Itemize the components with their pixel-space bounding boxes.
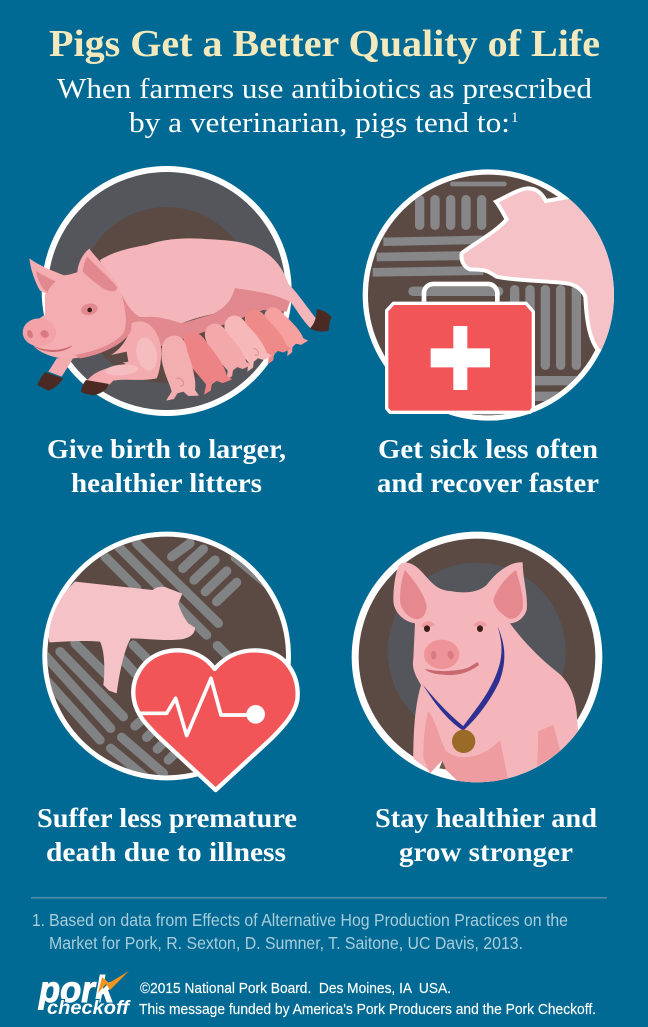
caption — [377, 433, 599, 498]
panel: healthier and stronger — [352, 532, 602, 867]
floor slats — [373, 182, 597, 421]
panel: less premature death — [37, 532, 298, 867]
subtitle: by a veterinarian, pigs tend to: — [129, 107, 510, 139]
leg shading — [423, 711, 510, 788]
front shoulder and leg — [87, 321, 161, 387]
icon: pig with medal — [352, 532, 602, 792]
eyes — [421, 621, 435, 628]
caption: grow stronger — [399, 836, 573, 867]
medal ribbon — [423, 626, 504, 731]
ears — [400, 570, 427, 619]
first aid kit — [387, 284, 533, 412]
subtitle — [57, 73, 593, 139]
copyright — [139, 980, 596, 1018]
icon: pig and first aid kit — [363, 169, 640, 421]
caption: Give birth to larger, — [47, 433, 286, 464]
caption: Stay healthier and — [375, 802, 597, 833]
snout — [23, 318, 56, 346]
gap between legs — [430, 761, 458, 781]
pig body and head — [393, 562, 580, 792]
floor slats — [40, 543, 273, 778]
caption — [37, 802, 297, 867]
pig silhouette — [459, 186, 614, 354]
subtitle: 1 — [511, 110, 518, 126]
pig silhouette — [49, 582, 195, 693]
hind hoof — [310, 309, 332, 331]
caption: Get sick less often — [378, 433, 598, 464]
logo: pork checkoff: checkoff — [47, 998, 131, 1019]
ears — [29, 258, 66, 295]
caption — [47, 433, 286, 498]
footnote: 1. — [32, 910, 45, 930]
caption: healthier litters — [71, 467, 262, 498]
footnote — [32, 910, 568, 953]
medal — [452, 730, 475, 753]
panel: larger litters — [23, 166, 332, 498]
footnote: Based on data from Effects of Alternative Hog Production Practices on the — [49, 910, 568, 930]
subtitle: When farmers use antibiotics as prescribed — [57, 73, 593, 105]
copyright: ©2015 National Pork Board. Des Moines, IA USA. — [140, 980, 451, 997]
copyright: This message funded by America's Pork Producers and the Pork Checkoff. — [139, 1001, 596, 1018]
piglets — [161, 299, 310, 401]
caption — [375, 802, 597, 867]
neck shade — [75, 295, 132, 358]
hind leg and body — [100, 238, 317, 329]
front leg left — [48, 357, 74, 377]
icon: sow nursing piglets — [23, 166, 332, 416]
eye — [80, 302, 99, 317]
snout and mouth — [424, 640, 459, 669]
belly shade — [122, 288, 290, 347]
head — [31, 270, 130, 359]
logo: pork checkoff: pork — [38, 969, 116, 1010]
footnote: Market for Pork, R. Sexton, D. Sumner, T. Saitone, UC Davis, 2013. — [49, 933, 523, 953]
caption: death due to illness — [46, 836, 286, 867]
caption: and recover faster — [377, 467, 599, 498]
panel: sick less — [362, 169, 614, 492]
front hoof right — [81, 380, 109, 395]
title: Pigs Get a Better Quality of Life — [49, 23, 600, 65]
heartbeat line — [138, 678, 265, 736]
icon: pig and heart — [40, 532, 298, 790]
heart — [133, 650, 298, 790]
caption: Suffer less premature — [37, 802, 297, 833]
